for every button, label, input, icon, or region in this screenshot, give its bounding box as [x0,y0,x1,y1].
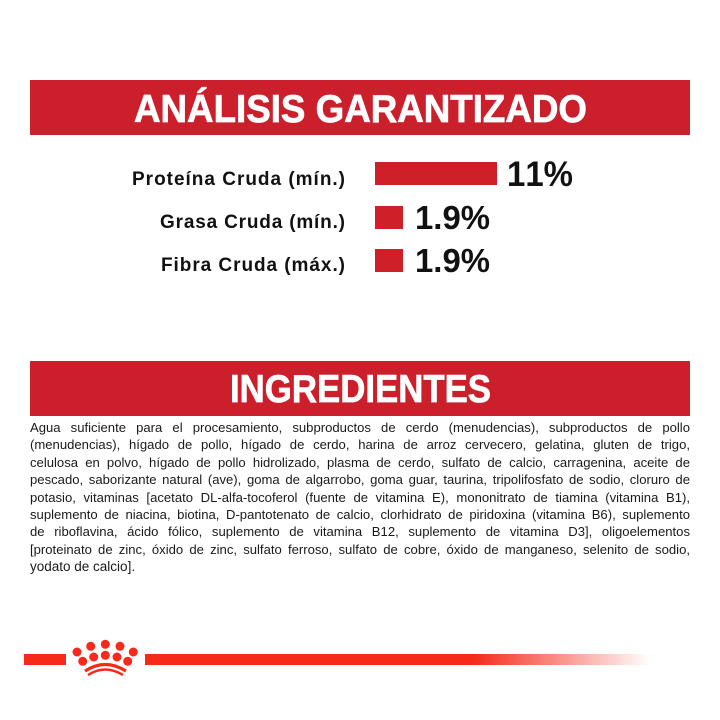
row: fiber [161,242,490,279]
text block: ingredients list: potasio, vitaminas [acetato DL-alfa-tocoferol (fuente de vitamina E), mononitrato de tiamina (vitamina B1), [30,490,690,505]
text block: ingredients list: suplemento de niacina, biotina, D-pantotenato de calcio, clorhidrato de piridoxina (vitamina B6), suplemento [30,507,690,522]
text block: ingredients list: yodato de calcio]. [30,559,135,574]
footer band: left segment [24,654,66,665]
text block: ingredients list: de riboflavina, ácido fólico, suplemento de vitamina B12, suplemento de vitamina D3], oligoelementos [30,524,690,539]
row: protein: 11% [507,155,573,194]
row: fiber: Fibra Cruda (máx.) [161,255,345,276]
row: protein [132,155,573,194]
row: fiber: 1.9% [415,242,490,279]
text block: ingredients list: (menudencias), hígado de pollo, hígado de cerdo, harina de arroz cervecero, gelatina, gluten de trigo, [30,437,690,452]
row: fat [160,199,490,236]
row: fat: Grasa Cruda (mín.) [160,212,345,233]
panel: guaranteed analysis heading banner [30,80,690,135]
panel: ingredients heading banner [30,361,690,416]
icon: royal crown logo [72,640,138,675]
text block: ingredients list: Agua suficiente para el procesamiento, subproductos de cerdo (menudencias), subproductos de pollo [30,420,690,435]
bar chart: guaranteed analysis [132,155,573,279]
text block: ingredients list [30,420,690,574]
text block: ingredients list: pescado, saborizante natural (ave), goma de algarrobo, goma guar, taurina, tripolifosfato de sodio, cloruro de [30,472,690,487]
text block: ingredients list: [proteinato de zinc, óxido de zinc, sulfato ferroso, sulfato de cobre, óxido de manganeso, selenito de sodio, [30,542,690,557]
heading: Ingredientes: INGREDIENTES [230,368,491,411]
text block: ingredients list: celulosa en polvo, hígado de pollo hidrolizado, plasma de cerdo, sulfato de calcio, carragenina, aceite de [30,455,690,470]
row: fat: 1.9% [415,199,490,236]
heading: Análisis garantizado: ANÁLISIS GARANTIZADO [134,87,587,131]
footer band: right segment fading out [145,654,650,665]
row: protein: Proteína Cruda (mín.) [132,169,345,190]
